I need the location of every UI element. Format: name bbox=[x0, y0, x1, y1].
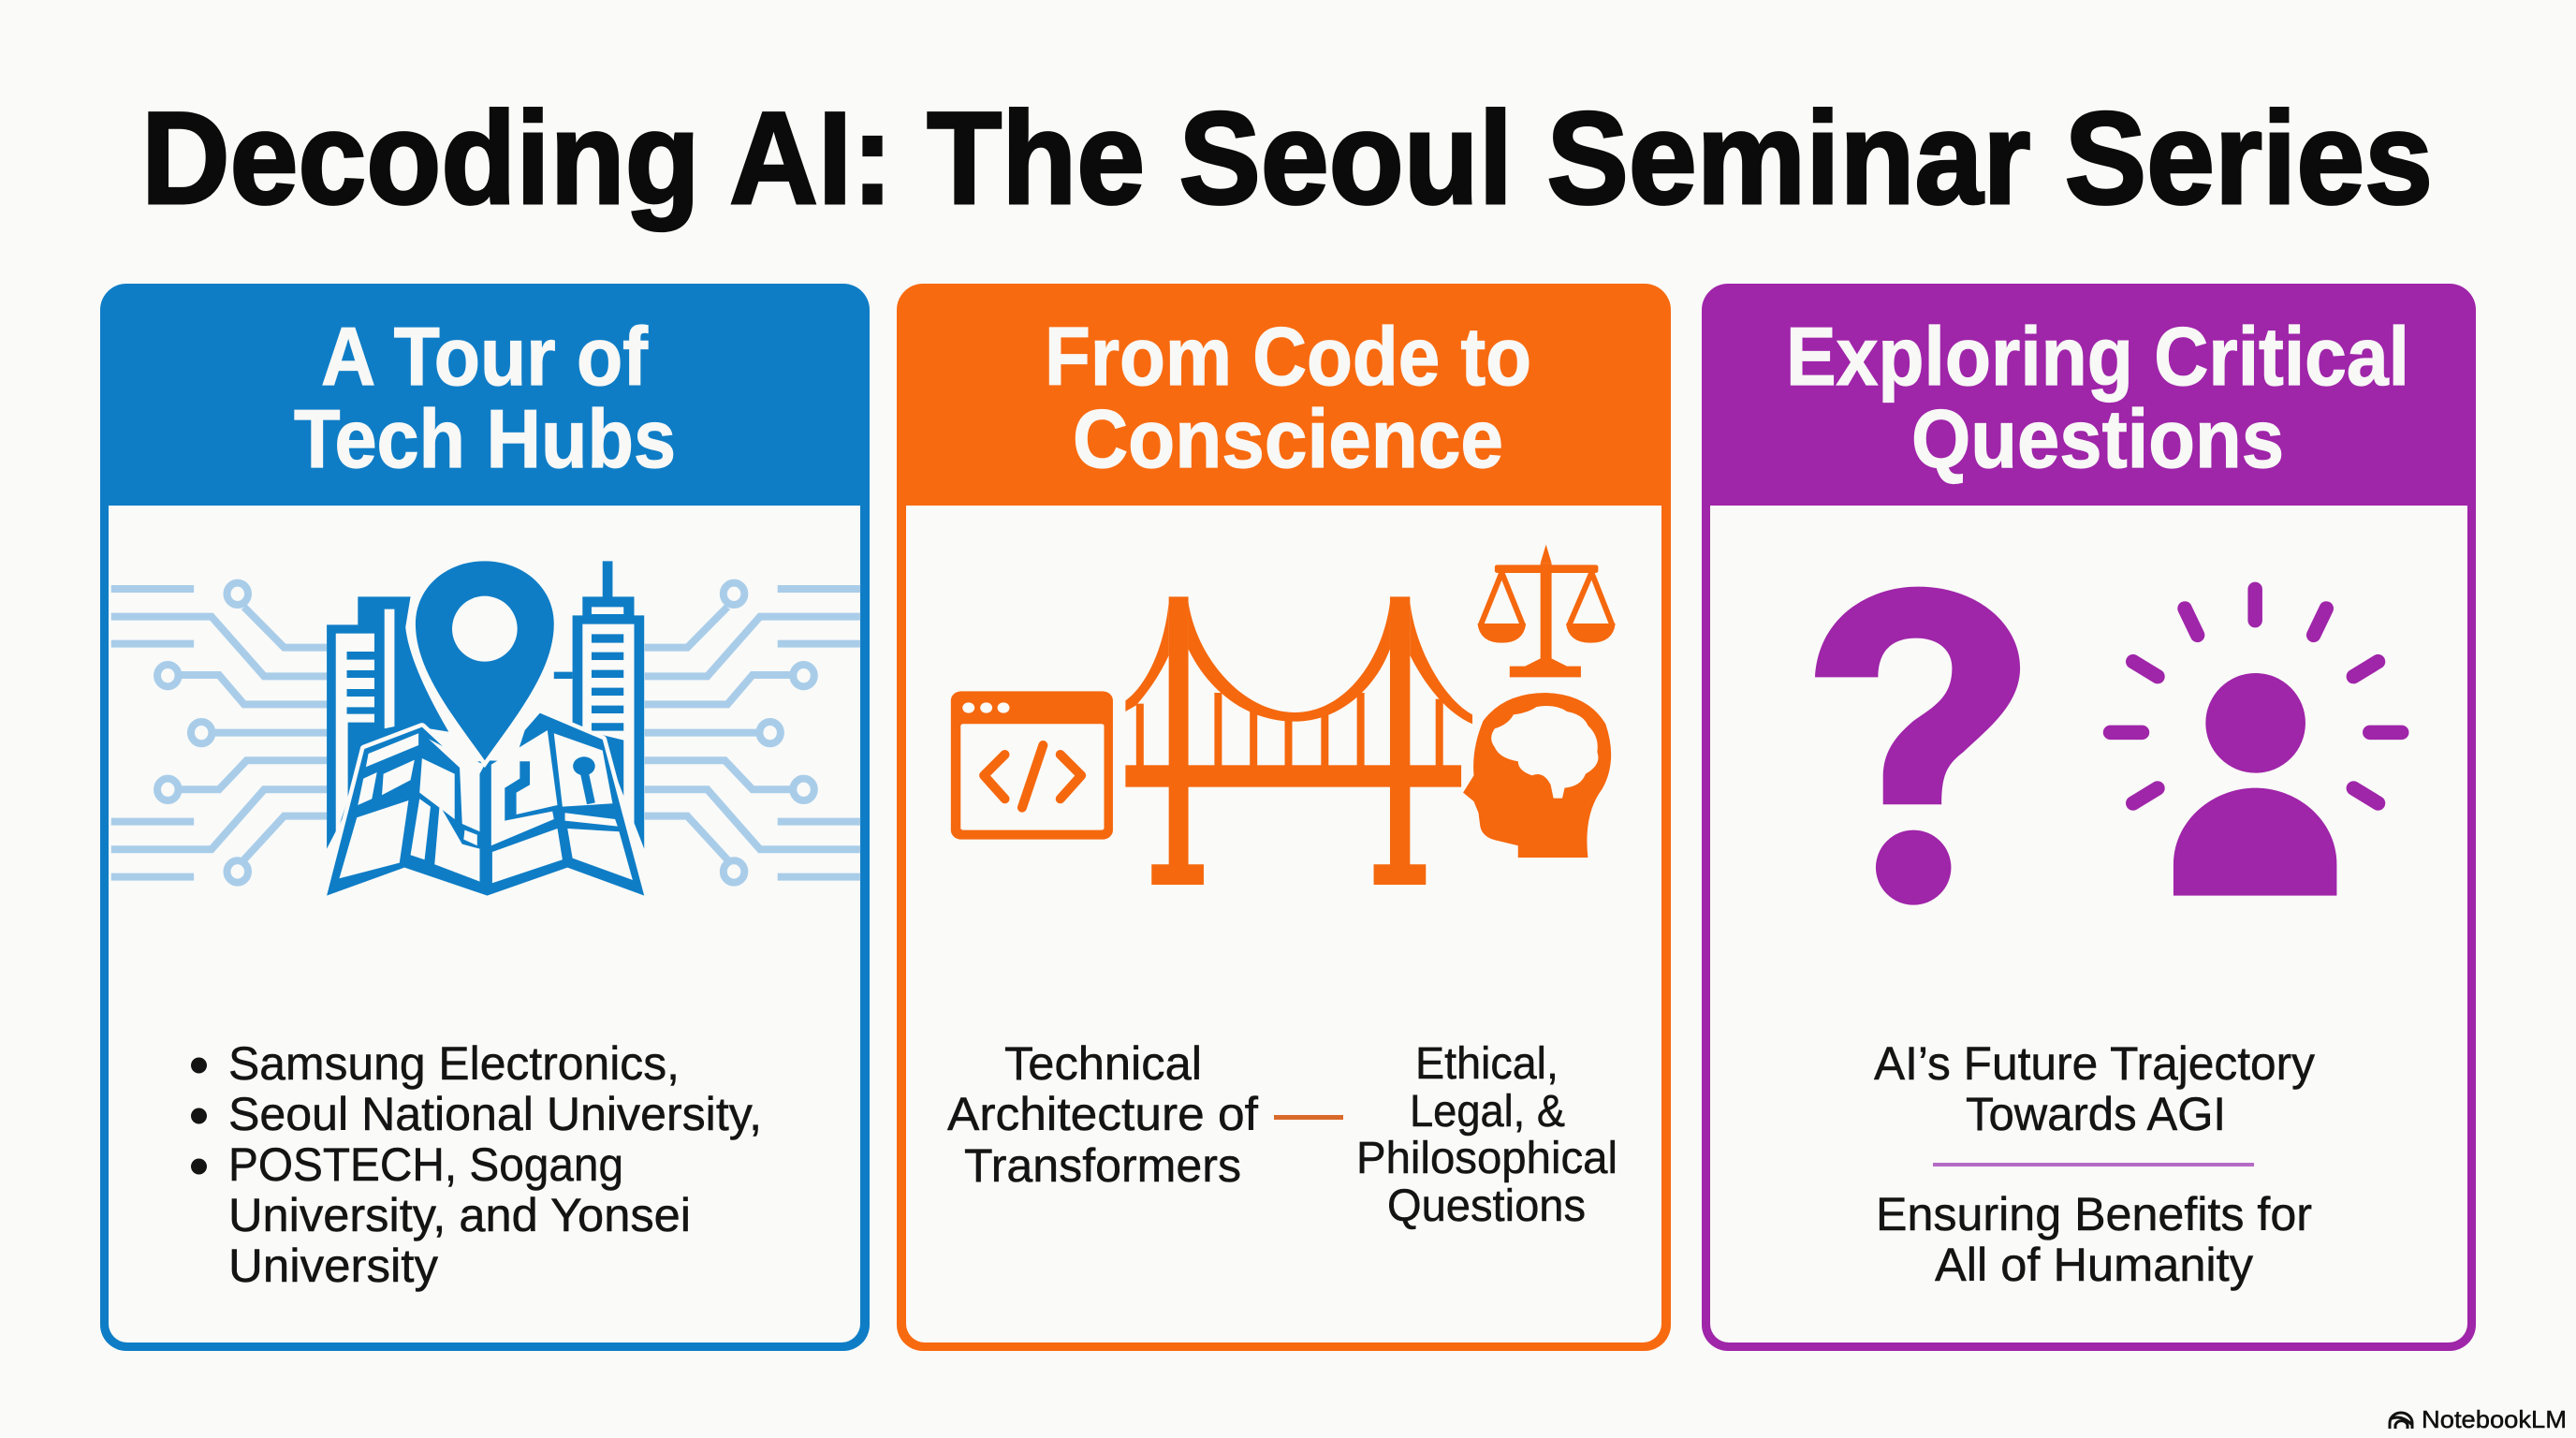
icon: NotebookLM arcs bbox=[2390, 1413, 2412, 1429]
bullet list: hosts bbox=[191, 1037, 762, 1292]
bullet list: hosts: University, and Yonsei bbox=[228, 1189, 691, 1241]
text: Technical Architecture of Transformers bbox=[947, 1037, 1258, 1192]
suspension bridge bbox=[1125, 596, 1472, 885]
heading: A Tour of Tech Hubs: Tech Hubs bbox=[294, 392, 676, 485]
person with radiating lines bbox=[2111, 589, 2402, 896]
heading: Exploring Critical Questions bbox=[1786, 310, 2409, 485]
heading: From Code to Conscience bbox=[1045, 310, 1531, 485]
watermark: NotebookLM: NotebookLM bbox=[2422, 1405, 2567, 1433]
text: Ethical, Legal, & Philosophical Questions: Legal, & bbox=[1410, 1087, 1565, 1137]
text: Ensuring Benefits for All of Humanity: All of Humanity bbox=[1935, 1239, 2253, 1291]
connector dash bbox=[1274, 1115, 1343, 1120]
right building bbox=[554, 561, 644, 849]
bullet list: hosts: University bbox=[228, 1240, 438, 1292]
map bbox=[327, 713, 644, 896]
heading: A Tour of Tech Hubs: A Tour of bbox=[321, 310, 649, 403]
panel frame: orange bbox=[897, 284, 1671, 1351]
panel frame: purple bbox=[1702, 284, 2476, 1351]
heading: Exploring Critical Questions: Questions bbox=[1911, 392, 2284, 485]
scales of justice bbox=[1477, 545, 1616, 677]
icon: code window, bridge, scales and head bbox=[951, 545, 1616, 885]
heading: From Code to Conscience: Conscience bbox=[1073, 392, 1503, 485]
panel: Exploring Critical Questions bbox=[1702, 284, 2476, 1351]
text: Ethical, Legal, & Philosophical Questions: Ethical, bbox=[1415, 1039, 1559, 1089]
bullet list: hosts: POSTECH, Sogang bbox=[228, 1138, 623, 1191]
heading: A Tour of Tech Hubs bbox=[294, 310, 676, 485]
panel: From Code to Conscience bbox=[897, 284, 1671, 1351]
divider line bbox=[1933, 1163, 2254, 1167]
bullet list: hosts: Seoul National University, bbox=[228, 1088, 762, 1140]
location pin bbox=[416, 561, 554, 760]
text: Technical Architecture of Transformers: Architecture of bbox=[947, 1088, 1258, 1140]
icon: map, pin and city with circuit traces bbox=[111, 561, 860, 896]
text: Technical Architecture of Transformers: Technical bbox=[1004, 1037, 1202, 1090]
bullet list: hosts: Samsung Electronics, bbox=[228, 1037, 680, 1090]
text: Technical Architecture of Transformers: Transformers bbox=[964, 1139, 1241, 1192]
heading: Exploring Critical Questions: Exploring Critical bbox=[1786, 310, 2409, 403]
circuit traces: right bbox=[645, 583, 860, 883]
text: Ethical, Legal, & Philosophical Questions: Philosophical bbox=[1356, 1134, 1617, 1183]
panel: A Tour of Tech Hubs bbox=[100, 284, 870, 1351]
text: Ethical, Legal, & Philosophical Questions: Questions bbox=[1387, 1181, 1586, 1231]
text: Ethical, Legal, & Philosophical Questions bbox=[1356, 1039, 1617, 1231]
code window bbox=[951, 691, 1113, 840]
text: AI's Future Trajectory Towards AGI: AI’s Future Trajectory bbox=[1874, 1037, 2315, 1090]
text: AI's Future Trajectory Towards AGI bbox=[1874, 1037, 2315, 1140]
heading: From Code to Conscience: From Code to bbox=[1045, 310, 1531, 403]
panel frame: blue bbox=[100, 284, 870, 1351]
text: Ensuring Benefits for All of Humanity: Ensuring Benefits for bbox=[1876, 1188, 2312, 1240]
text: Ensuring Benefits for All of Humanity bbox=[1876, 1188, 2312, 1291]
title: Decoding AI: The Seoul Seminar Series bbox=[141, 84, 2433, 231]
icon: question mark and enlightened person bbox=[1815, 587, 2402, 905]
head with brain bbox=[1463, 693, 1611, 858]
left building bbox=[327, 596, 448, 849]
text: AI's Future Trajectory Towards AGI: Towards AGI bbox=[1966, 1088, 2226, 1140]
question mark bbox=[1815, 587, 2020, 905]
circuit traces: left bbox=[111, 583, 327, 883]
